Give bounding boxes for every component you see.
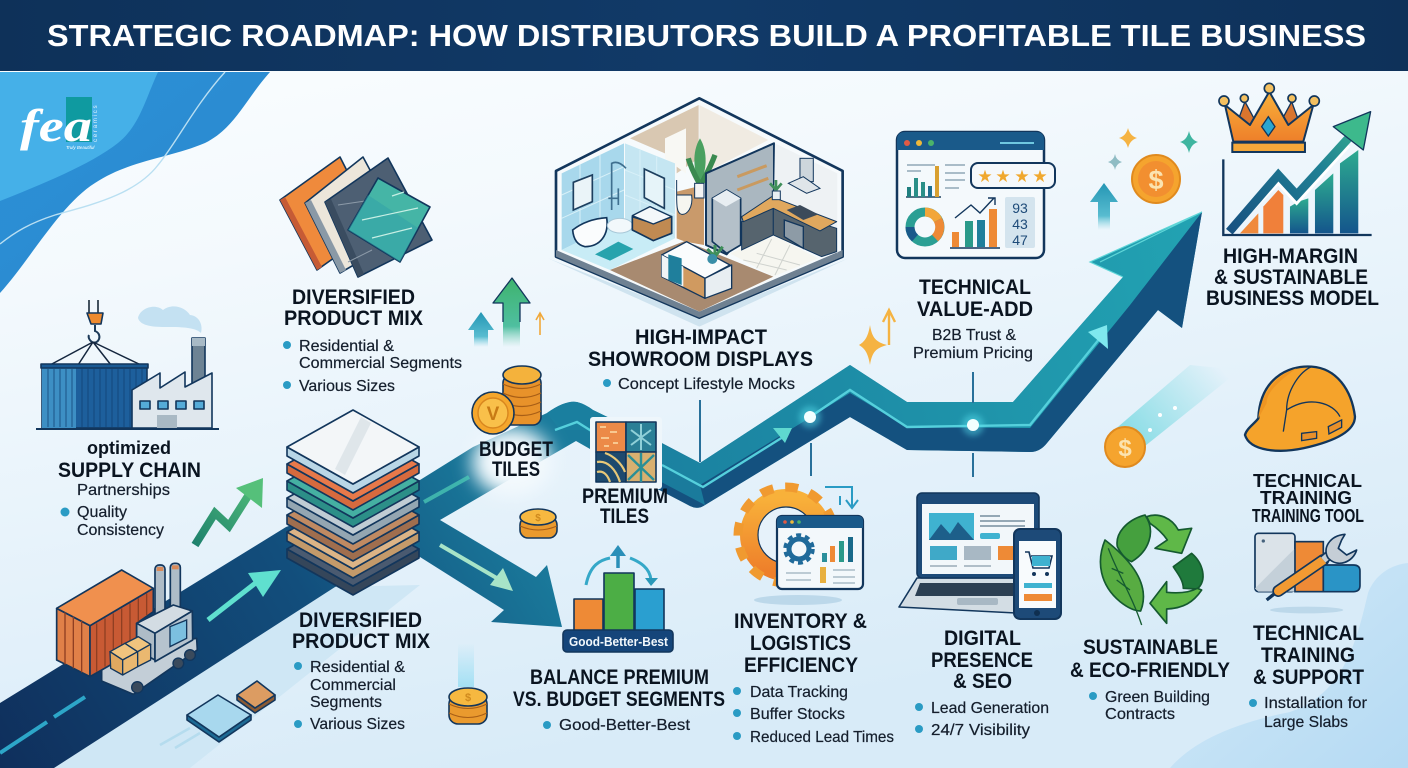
icon: coin with sparkles and up arrow [1090, 128, 1198, 230]
text block: premium tiles [582, 485, 668, 528]
text block: optimized supply chain: Partnerships [77, 482, 170, 499]
icon: hard hat [1245, 367, 1355, 451]
icon: laptop and phone [899, 493, 1061, 619]
chart: rising bars with growth arrow [1223, 112, 1372, 235]
text block: diversified product mix (bottom): Residential & [310, 659, 405, 676]
logo: fea ceramics: Truly Beautiful [66, 145, 95, 150]
icon: technical data dashboard: 43 [1012, 216, 1028, 232]
text block: inventory and logistics [733, 610, 894, 746]
text block: technical training tool: TRAINING TOOL [1252, 506, 1364, 526]
text block: technical value-add: Premium Pricing [913, 345, 1033, 362]
glowing nodes [799, 406, 984, 436]
text block: high-margin business model [1206, 245, 1379, 310]
arrows: rising above coins [468, 278, 544, 347]
cloud [138, 306, 202, 333]
text block: premium tiles: PREMIUM [582, 485, 668, 508]
connector lines [700, 372, 973, 477]
text block: technical training and support: TECHNICAL [1253, 622, 1364, 645]
text block: diversified product mix (bottom): DIVERSIFIED [299, 609, 422, 632]
text block: high-impact showroom displays: SHOWROOM DISPLAYS [588, 348, 813, 371]
text block: inventory and logistics: LOGISTICS [750, 632, 851, 655]
text block: sustainable and eco-friendly [1070, 636, 1230, 723]
header banner [0, 0, 1408, 71]
text block: diversified product mix (top): DIVERSIFIED [292, 286, 415, 309]
text block: inventory and logistics: Buffer Stocks [750, 706, 845, 723]
text block: budget tiles: BUDGET [479, 438, 553, 461]
text block: technical training and support: Large Slabs [1264, 714, 1348, 731]
icon: coin with sparkles and up arrow: $ [1148, 165, 1164, 195]
text block: digital presence and seo: 24/7 Visibility [931, 722, 1030, 739]
text block: diversified product mix (top) [283, 286, 462, 395]
text block: diversified product mix (bottom) [292, 609, 430, 733]
icon: small coin stack: $ [535, 513, 541, 524]
text block: technical training and support: Installation for [1264, 695, 1368, 712]
text block: digital presence and seo: & SEO [953, 670, 1012, 693]
text block: balance premium vs. budget: Good-Better-Best [559, 717, 691, 734]
title: STRATEGIC ROADMAP: HOW DISTRIBUTORS BUILD A PROFITABLE TILE BUSINESS [47, 18, 1366, 53]
logo: fea ceramics [20, 97, 99, 151]
text block: optimized supply chain: optimized [87, 438, 171, 458]
text block: diversified product mix (top): Residential & [299, 338, 394, 355]
text block: optimized supply chain [58, 438, 201, 539]
text block: technical value-add [913, 276, 1033, 362]
text block: high-impact showroom displays [588, 326, 813, 393]
icon: fanned tile samples [280, 157, 432, 277]
white halo behind tile labels [472, 428, 552, 496]
text block: technical value-add: B2B Trust & [932, 327, 1016, 344]
icon: tile stack [287, 410, 419, 595]
icon: recycling leaf [1100, 515, 1203, 625]
text block: diversified product mix (bottom): Commercial [310, 677, 396, 694]
icon: isometric showroom [548, 98, 848, 327]
text block: high-impact showroom displays: Concept Lifestyle Mocks [618, 376, 795, 393]
background blob: bottom right [1170, 563, 1408, 768]
text block: optimized supply chain: SUPPLY CHAIN [58, 459, 201, 482]
arrow: green zigzag growth [195, 478, 263, 545]
icon: technical data dashboard: ★ [1014, 167, 1030, 187]
text block: high-impact showroom displays: HIGH-IMPACT [635, 326, 767, 349]
text block: digital presence and seo: DIGITAL [944, 627, 1021, 650]
text block: budget tiles: TILES [492, 458, 540, 481]
text block: diversified product mix (bottom): Segments [310, 694, 382, 711]
text block: digital presence and seo: Lead Generation [931, 700, 1049, 717]
text block: high-margin business model: BUSINESS MODEL [1206, 287, 1379, 310]
text block: inventory and logistics: EFFICIENCY [744, 654, 858, 677]
icon: technical data dashboard: ★ [977, 167, 993, 187]
text block: technical training tool: TECHNICAL [1253, 471, 1362, 491]
icon: small coin stack [520, 509, 557, 538]
donut chart [910, 212, 940, 242]
text block: technical training and support: & SUPPORT [1253, 666, 1364, 689]
icon: premium tile sample [590, 417, 662, 489]
arrow marker: lower branch [440, 545, 513, 591]
text block: inventory and logistics: Data Tracking [750, 684, 848, 701]
logo: fea ceramics: fea [20, 101, 92, 151]
icon: gear and dashboard [738, 487, 863, 605]
icon: technical data dashboard: ★ [995, 167, 1011, 187]
arrow marker: rising road [773, 325, 1108, 443]
icon: crown [1219, 83, 1319, 152]
road highlight line [555, 338, 1100, 487]
icon: technical data dashboard: ★ [1032, 167, 1048, 187]
text block: high-margin business model: & SUSTAINABLE [1214, 266, 1368, 289]
text block: technical training tool [1252, 471, 1364, 526]
icon: coin stack with glow [449, 643, 487, 724]
icon: falling coin with trail: $ [1118, 435, 1132, 462]
icon: technical data dashboard [897, 132, 1055, 258]
icon: technical data dashboard: 93 [1012, 200, 1028, 216]
icon: budget coins [472, 366, 541, 434]
icon: technical data dashboard: 47 [1012, 232, 1028, 248]
text block: sustainable and eco-friendly: Contracts [1105, 706, 1175, 723]
background swoosh: top left [0, 72, 270, 293]
text block: high-margin business model: HIGH-MARGIN [1223, 245, 1358, 268]
text block: digital presence and seo [915, 627, 1049, 739]
text block: diversified product mix (top): PRODUCT MIX [284, 307, 423, 330]
text block: balance premium vs. budget: BALANCE PREMIUM [530, 666, 709, 689]
text block: diversified product mix (top): Commercial Segments [299, 355, 462, 372]
text block: technical training and support: TRAINING [1261, 644, 1355, 667]
icon: small loose tiles [160, 681, 275, 748]
arrow marker: main road [208, 570, 281, 620]
icon: bar chart good-better-best [563, 545, 673, 652]
logo: fea ceramics: ceramics [93, 104, 99, 142]
text block: budget tiles [479, 438, 553, 481]
text block: inventory and logistics: Reduced Lead Times [750, 729, 894, 746]
text block: balance premium vs. budget: VS. BUDGET SEGMENTS [513, 688, 725, 711]
text block: optimized supply chain: Quality [77, 504, 127, 521]
text block: optimized supply chain: Consistency [77, 522, 164, 539]
icon: bar chart good-better-best: Good-Better-Best [569, 634, 669, 649]
icon: falling coin with trail [1105, 365, 1240, 467]
text block: premium tiles: TILES [600, 505, 649, 528]
text block: diversified product mix (top): Various Sizes [299, 378, 395, 395]
text block: technical value-add: TECHNICAL [919, 276, 1031, 299]
text block: diversified product mix (bottom): Various Sizes [310, 716, 405, 733]
icon: coin stack with glow: $ [465, 692, 471, 704]
text block: sustainable and eco-friendly: Green Building [1105, 689, 1210, 706]
icon: crane lifting container and factory [36, 300, 219, 430]
text block: digital presence and seo: PRESENCE [931, 649, 1033, 672]
icon: truck with container and factory [57, 563, 197, 694]
text block: technical training tool: TRAINING [1260, 488, 1352, 508]
text block: sustainable and eco-friendly: & ECO-FRIENDLY [1070, 659, 1230, 682]
text block: diversified product mix (bottom): PRODUCT MIX [292, 630, 430, 653]
icon: budget coins: V [487, 404, 500, 425]
text block: technical value-add: VALUE-ADD [917, 298, 1033, 321]
text block: balance premium vs. budget [513, 666, 725, 734]
icon: training tool wrench [1255, 533, 1360, 613]
text block: sustainable and eco-friendly: SUSTAINABLE [1083, 636, 1218, 659]
text block: technical training and support [1249, 622, 1368, 731]
icon: sparkle arrow [859, 310, 895, 365]
text block: inventory and logistics: INVENTORY & [734, 610, 867, 633]
road: main roadmap path with arrowheads [0, 212, 1202, 768]
